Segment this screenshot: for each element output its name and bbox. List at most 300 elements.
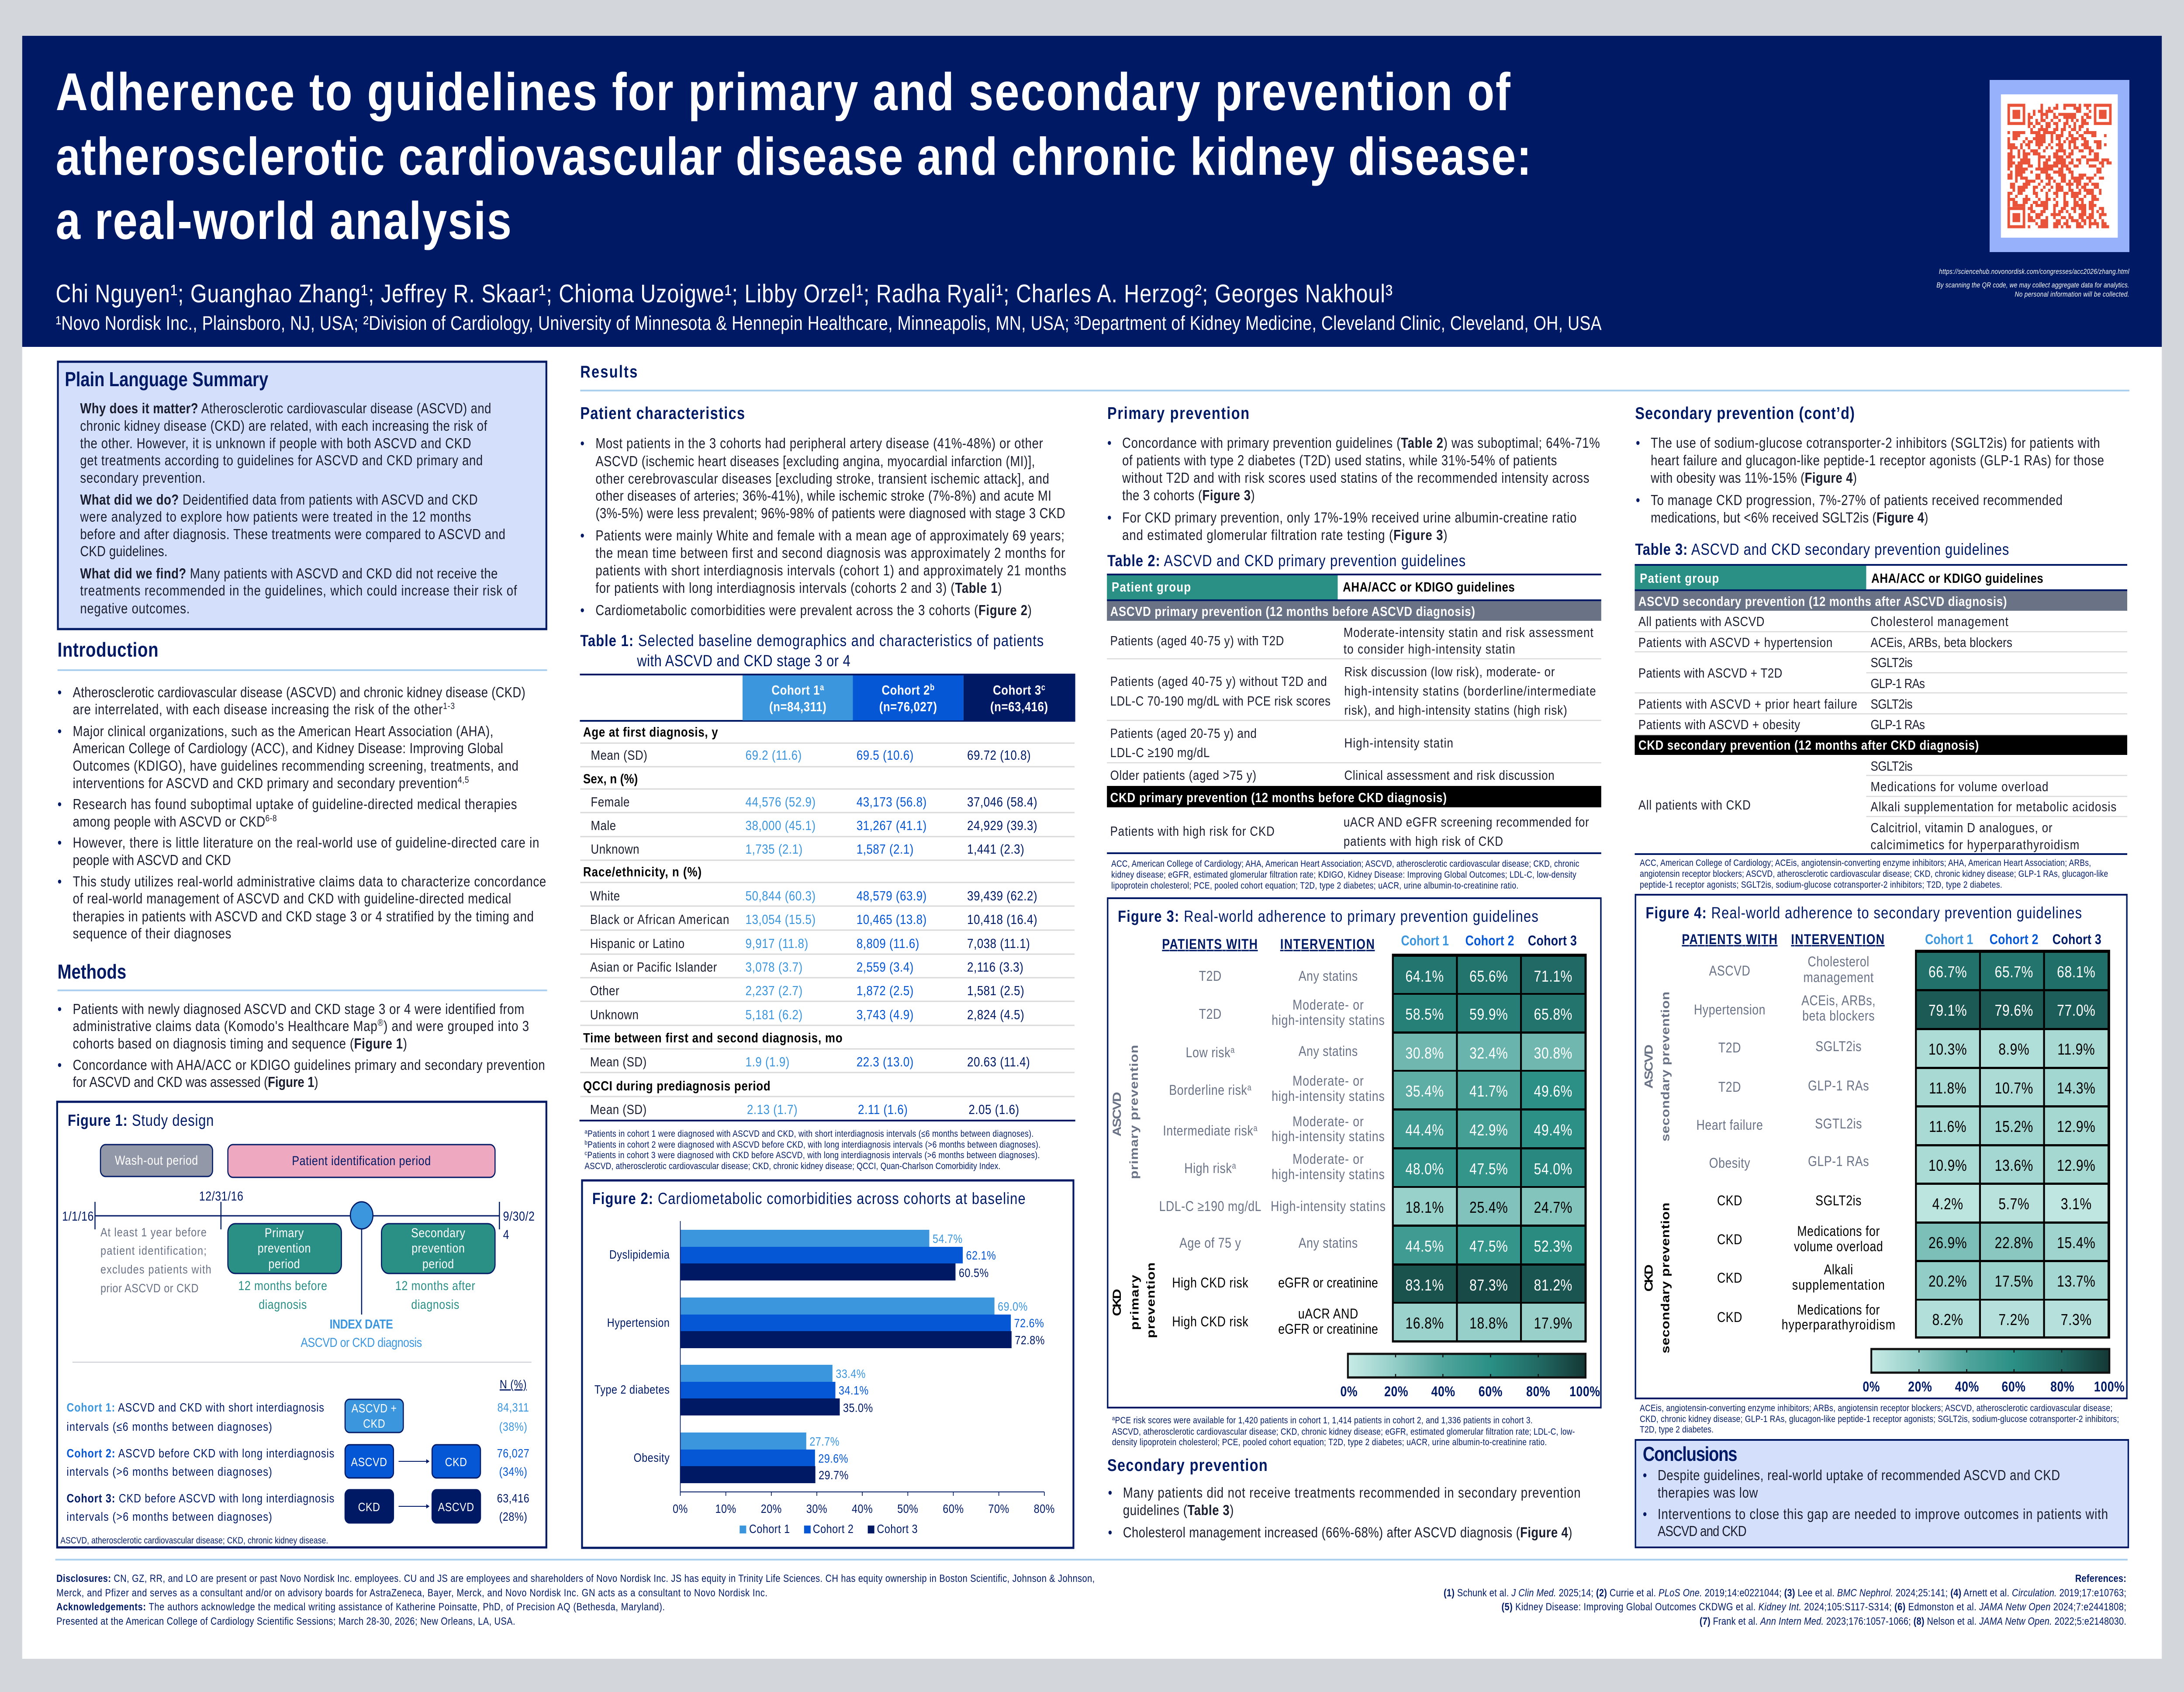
figure 4 heatmap: 14.3% (2057, 1080, 2096, 1097)
table 3 footnote: peptide-1 receptor agonists; SGLT2is, sodium-glucose cotransporter-2 inhibitors; T2D, type 2 diabetes. (1640, 880, 2002, 890)
table 1 rows (583, 725, 1037, 1118)
figure 4 rotated group labels: secondary prevention (1659, 1202, 1672, 1353)
section: patient characteristics (580, 404, 1067, 619)
figure 3 heatmap: 44.4% (1405, 1121, 1444, 1139)
table 1 rows: Age at first diagnosis, y (583, 725, 718, 740)
secondary prevention period box: prevention (411, 1241, 465, 1256)
chart axes: 30% (806, 1502, 827, 1516)
table 1 rows: Black or African American (590, 912, 729, 927)
panel: methods: Concordance with AHA/ACC or KDIGO guidelines primary and secondary prevention (73, 1058, 545, 1073)
authors: Chi Nguyen¹; Guanghao Zhang¹; Jeffrey R. Skaar¹; Chioma Uzoigwe¹; Libby Orzel¹; Radha Ryali¹; Charles A. Herzog²; Georges Nakhoul³ (56, 280, 1393, 308)
text: what did we do: CKD guidelines. (80, 544, 168, 560)
figure 3 row labels: Low risk (1186, 1045, 1230, 1061)
cohort 3 row: (28%) (499, 1510, 527, 1524)
panel: conclusions (1635, 1440, 2128, 1547)
bars: type 2 diabetes: Type 2 diabetes (594, 1383, 670, 1397)
cohort 3 header (964, 675, 1075, 720)
title (56, 62, 1532, 250)
figure 4 row labels: CKD (1717, 1232, 1742, 1248)
panel: methods: ) and were grouped into 3 (384, 1019, 529, 1035)
figure 3 rotated group labels: primary prevention (1127, 1045, 1140, 1179)
figure 3 heatmap (1392, 954, 1586, 1343)
panel: introduction: • (58, 797, 62, 813)
text: what did we find (80, 566, 517, 617)
table 2 rows: high-intensity statins (borderline/intermediate (1344, 684, 1596, 699)
figure 4 heatmap: 15.4% (2057, 1234, 2096, 1252)
bars: dyslipidemia: Dyslipidemia (609, 1248, 670, 1262)
table 3 ASCVD rows: SGLT2is (1870, 697, 1913, 712)
figure 3 row labels: uACR AND (1298, 1306, 1358, 1322)
table 1 rows: 10,465 (13.8) (857, 912, 927, 927)
table 1 rows: Female (591, 795, 630, 810)
section: secondary prevention continued: • (1636, 493, 1640, 509)
panel: conclusions: • (1643, 1507, 1647, 1522)
table 3 ASCVD rows: GLP-1 RAs (1870, 676, 1925, 692)
table 1 rows: 1.9 (1.9) (746, 1055, 790, 1070)
figure 4 row labels: CKD (1717, 1270, 1742, 1286)
figure 3 heatmap: 81.2% (1534, 1277, 1572, 1294)
table 3 footnote (1640, 858, 2108, 890)
figure 3 column headers (1162, 933, 1577, 952)
panel: conclusions: Interventions to close this gap are needed to improve outcomes in patients with (1658, 1507, 2108, 1522)
table 2 title: Table 2: ASCVD and CKD primary prevention guidelines (1107, 552, 1466, 570)
chart axes: 70% (988, 1502, 1009, 1516)
figure 4 heatmap: 8.2% (1932, 1311, 1963, 1329)
figure 4 heatmap: 10.9% (1928, 1157, 1967, 1175)
cohort 2 row: CKD (445, 1456, 467, 1469)
figure 3 colour scale: 60% (1479, 1384, 1503, 1400)
section: patient characteristics: ASCVD (ischemic heart diseases [excluding angina, myocardial infarction (MI)], (595, 454, 1035, 470)
section: secondary prevention: Secondary prevention (1107, 1456, 1268, 1475)
bars: hypertension: Hypertension (607, 1316, 670, 1330)
table 2 footnote: lipoprotein cholesterol; PCE, pooled cohort equation; T2D, type 2 diabetes; uACR, urine albumin-to-creatinine ratio. (1111, 881, 1519, 891)
section: secondary prevention: guidelines (Table 3) (1123, 1503, 1234, 1519)
figure 4 row labels: Heart failure (1697, 1118, 1763, 1133)
figure 3 row labels: high-intensity statins (1272, 1167, 1385, 1183)
figure 3 row labels: high-intensity statins (1272, 1129, 1385, 1145)
figure 4 heatmap: 10.7% (1995, 1080, 2033, 1097)
figure 3 heatmap: 71.1% (1534, 968, 1572, 986)
figure 4 footnote (1640, 1404, 2119, 1435)
table 1 rows: 39,439 (62.2) (967, 889, 1037, 904)
section: primary prevention: • (1107, 436, 1112, 451)
cohort 3 header: Cohort 3 (993, 683, 1041, 698)
cohort 1 row: ASCVD + (352, 1402, 397, 1415)
figure 3 row labels: Moderate- or (1292, 1114, 1364, 1130)
panel: introduction (58, 639, 547, 942)
secondary prevention period box: Secondary (411, 1225, 466, 1240)
figure 3 heatmap: 58.5% (1405, 1006, 1444, 1024)
panel: methods: cohorts based on diagnosis timing and sequence (Figure 1) (73, 1036, 408, 1052)
cohort 1 row: (38%) (499, 1420, 527, 1434)
section: primary prevention: For CKD primary prevention, only 17%-19% received urine albumin-creatine ratio (1122, 510, 1577, 526)
panel: methods (58, 961, 547, 1090)
figure 3 row labels: Moderate- or (1292, 1073, 1364, 1089)
figure 3 row labels: high-intensity statins (1272, 1013, 1385, 1028)
table 3 ASCVD rows: GLP-1 RAs (1870, 717, 1925, 733)
table 1 title: with ASCVD and CKD stage 3 or 4 (636, 652, 851, 670)
figure 3 colour scale: 40% (1431, 1384, 1455, 1400)
table 1 rows: Time between first and second diagnosis, mo (583, 1031, 843, 1046)
wash-out period box (100, 1145, 213, 1176)
section: patient characteristics: • (580, 528, 585, 544)
footer: references (1444, 1572, 2126, 1627)
table 3 header: AHA/ACC or KDIGO guidelines (1871, 571, 2043, 586)
table 3 CKD rows: Alkali supplementation for metabolic acidosis (1870, 799, 2117, 815)
cohort 3 header: (n=63,416) (990, 699, 1048, 715)
figure 4 heatmap: 79.1% (1928, 1002, 1967, 1020)
figure 3 heatmap: 30.8% (1534, 1045, 1572, 1062)
figure 3 heatmap: 24.7% (1534, 1199, 1572, 1217)
table 1 rows: 2.05 (1.6) (969, 1102, 1019, 1118)
figure 3 colour scale (1340, 1354, 1600, 1400)
table 1 rows: 31,267 (41.1) (857, 818, 927, 834)
wash-out description: patient identification; (100, 1244, 207, 1258)
table 1 rows: 2.11 (1.6) (858, 1102, 908, 1118)
table 1 rows: 5,181 (6.2) (746, 1007, 803, 1023)
section: primary prevention: without T2D and with risk scores used statins of the recommended intensity across (1122, 471, 1590, 486)
table 1 rows: Sex, n (%) (583, 772, 638, 787)
figure 3 heatmap: 41.7% (1469, 1083, 1508, 1100)
table 1 rows: 2.13 (1.7) (747, 1102, 798, 1118)
table 3 CKD rows: All patients with CKD (1638, 798, 1751, 813)
figure 3 heatmap: 25.4% (1469, 1199, 1508, 1217)
affiliations: ¹Novo Nordisk Inc., Plainsboro, NJ, USA; ²Division of Cardiology, University of Minnesota & Hennepin Healthcare, Minneapolis, MN, USA; ³Department of Kidney Medicine, Cleveland Clinic, Cleveland, OH, USA (56, 312, 1602, 334)
text: what did we do: before and after diagnosis. These treatments were compared to ASCVD and (80, 527, 506, 543)
cohort 3 header: c (1041, 682, 1046, 692)
figure 4 row labels: SGTL2is (1815, 1116, 1862, 1132)
figure 3 heatmap: 65.6% (1469, 968, 1508, 986)
table 2 footnote (1111, 859, 1579, 891)
table 3 title: Table 3: ASCVD and CKD secondary prevention guidelines (1635, 540, 2009, 559)
table 1 rows: 69.72 (10.8) (967, 748, 1031, 763)
table 2 rows: Patients (aged 40-75 y) without T2D and (1110, 674, 1327, 689)
bars: dyslipidemia: 54.7% (933, 1232, 963, 1246)
heading: results: Results (580, 362, 638, 381)
figure 4 column headers: Cohort 3 (2053, 932, 2101, 948)
figure 3 row labels: T2D (1199, 969, 1222, 984)
cohort 1 row (67, 1399, 529, 1434)
figure 3 heatmap: 87.3% (1469, 1277, 1508, 1294)
table 2 rows: Older patients (aged >75 y) (1110, 768, 1257, 783)
cohort 2 header: (n=76,027) (879, 699, 937, 715)
panel: conclusions: Despite guidelines, real-world uptake of recommended ASCVD and CKD (1658, 1468, 2060, 1484)
figure 4 row labels: Alkali (1824, 1262, 1853, 1278)
section: secondary prevention continued: To manage CKD progression, 7%-27% of patients received recommended (1651, 493, 2063, 509)
table 1 rows: Race/ethnicity, n (%) (583, 865, 702, 880)
figure 4 heatmap: 8.9% (1998, 1041, 2029, 1059)
figure 3 heatmap: 48.0% (1405, 1160, 1444, 1178)
figure 4 heatmap: 13.7% (2057, 1273, 2096, 1291)
figure 4 row labels: T2D (1718, 1080, 1741, 1095)
figure 4 heatmap: 22.8% (1995, 1234, 2033, 1252)
chart axes: 80% (1034, 1502, 1055, 1516)
wash-out description: excludes patients with (100, 1263, 211, 1277)
figure 4 column headers: Cohort 2 (1990, 932, 2039, 948)
table 1 rows: 2,237 (2.7) (746, 983, 803, 999)
table 1 rows: Mean (SD) (590, 1102, 647, 1118)
figure 4 row labels: hyperparathyroidism (1782, 1317, 1896, 1333)
timeline: 4 (503, 1227, 509, 1242)
figure 3 footnote: PCE risk scores were available for 1,420 patients in cohort 1, 1,414 patients in cohort 2, and 1,336 patients in cohort 3. (1115, 1416, 1533, 1426)
figure 3 colour scale: 80% (1526, 1384, 1550, 1400)
figure 3 heatmap: 65.8% (1534, 1006, 1572, 1024)
figure 4 heatmap: 11.6% (1929, 1118, 1966, 1136)
figure 4 footnote: ACEis, angiotensin-converting enzyme inhibitors; ARBs, angiotensin receptor blockers; ASCVD, atherosclerotic cardiovascular disease; (1640, 1404, 2113, 1413)
table 1 rows: 44,576 (52.9) (746, 795, 816, 810)
panel: introduction: Atherosclerotic cardiovascular disease (ASCVD) and chronic kidney disease (CKD) (73, 685, 525, 701)
table 1 rows: 43,173 (56.8) (857, 795, 927, 810)
figure 2 title: Figure 2: Cardiometabolic comorbidities across cohorts at baseline (592, 1190, 1026, 1208)
secondary prevention period box (381, 1224, 495, 1273)
bars: hypertension: 69.0% (998, 1300, 1028, 1314)
timeline: 1/1/16 (62, 1209, 94, 1224)
table 1 rows: 20.63 (11.4) (967, 1055, 1030, 1070)
table 2 rows (1110, 625, 1596, 783)
figure 3 heatmap: 52.3% (1534, 1238, 1572, 1256)
table 2 rows: Patients (aged 20-75 y) and (1110, 726, 1257, 741)
figure 3 column headers: Cohort 3 (1528, 933, 1577, 949)
table 1 rows: Asian or Pacific Islander (590, 960, 717, 975)
figure 3 column headers: INTERVENTION (1280, 937, 1375, 952)
bars: hypertension: 72.6% (1014, 1317, 1044, 1330)
figure 3 column headers: Cohort 2 (1465, 933, 1514, 949)
bars: dyslipidemia: 60.5% (959, 1266, 989, 1280)
cohort 2 row: 76,027 (497, 1447, 529, 1460)
title: Adherence to guidelines for primary and secondary prevention of (56, 62, 1511, 121)
12 months before (238, 1278, 328, 1312)
figure 4 row labels: GLP-1 RAs (1808, 1078, 1869, 1094)
table 2 CKD row: Patients with high risk for CKD (1110, 824, 1275, 839)
figure 4 column headers: INTERVENTION (1791, 932, 1885, 948)
table 2 footnote: kidney disease; eGFR, estimated glomerular filtration rate; KDIGO, Kidney Disease: Improving Global Outcomes; LDL-C, low-density (1111, 870, 1576, 880)
footer: disclosures and acknowledgements: Merck, and Pfizer and serves as a consultant and/or on advisory boards for AstraZeneca, Bayer, Merck, and Novo Nordisk Inc. GN acts as a consultant to Novo Nordisk Inc. (56, 1587, 768, 1599)
title: a real-world analysis (56, 190, 512, 250)
table 1 rows: Other (590, 983, 619, 999)
text: what did we do: were analyzed to explore how patients were treated in the 12 months (79, 509, 471, 525)
figure 3 heatmap: 30.8% (1405, 1045, 1444, 1062)
panel: introduction: Outcomes (KDIGO), have guidelines recommending screening, treatments, and (73, 758, 519, 774)
panel: introduction: among people with ASCVD or CKD (73, 814, 266, 830)
figure 4 row labels: ASCVD (1709, 963, 1750, 979)
figure 3 heatmap: 17.9% (1534, 1315, 1572, 1332)
section: secondary prevention: Many patients did not receive treatments recommended in secondary prevention (1123, 1485, 1581, 1501)
section: secondary prevention continued: The use of sodium-glucose cotransporter-2 inhibitors (SGLT2is) for patients with (1651, 436, 2100, 451)
figure 4 heatmap: 79.6% (1995, 1002, 2033, 1020)
panel: conclusions: • (1643, 1468, 1647, 1484)
cohort 2 row: ASCVD (351, 1456, 387, 1469)
figure 3 column headers: Cohort 1 (1401, 933, 1449, 949)
table 3 ASCVD rows: SGLT2is (1870, 655, 1913, 671)
section: secondary prevention: • (1108, 1525, 1113, 1541)
panel: methods: for ASCVD and CKD was assessed (Figure 1) (73, 1075, 318, 1090)
section: primary prevention: Primary prevention (1107, 404, 1250, 423)
figure 3 rotated group labels: prevention (1144, 1262, 1158, 1338)
figure 4 heatmap: 4.2% (1932, 1195, 1963, 1213)
figure 4 heatmap: 11.8% (1929, 1080, 1966, 1097)
cohort 1 row: CKD (363, 1417, 385, 1431)
footer: references: (7) Frank et al. Ann Intern Med. 2023;176:1057-1066; (8) Nelson et al. JAMA Netw Open. 2022;5:e2148030. (1700, 1615, 2126, 1627)
panel: introduction: 1-3 (443, 702, 455, 711)
chart legend: Cohort 2 (813, 1522, 854, 1536)
section: secondary prevention continued: Secondary prevention (cont’d) (1635, 404, 1855, 423)
section: primary prevention: • (1107, 510, 1112, 526)
panel: introduction: are interrelated, with each disease increasing the risk of the other (73, 702, 443, 718)
section: patient characteristics: • (580, 603, 585, 619)
figure 4 row labels: ACEis, ARBs, (1801, 993, 1876, 1009)
figure 4 row labels (1694, 954, 1896, 1333)
figure 4 colour scale: 60% (2001, 1379, 2026, 1395)
cohort 1 row: intervals (≤6 months between diagnoses) (67, 1420, 272, 1434)
table 1: baseline characteristics (580, 632, 1075, 1171)
primary prevention period box: Primary (265, 1225, 304, 1240)
panel: introduction: • (58, 874, 62, 890)
chart legend (740, 1522, 918, 1536)
text: what did we find: treatments recommended in the guidelines, which could increase their risk of (80, 583, 517, 599)
section: secondary prevention continued: medications, but <6% received SGLT2is (Figure 4) (1651, 510, 1928, 526)
table 3 CKD rows: Calcitriol, vitamin D analogues, or (1870, 820, 2053, 836)
text: why does it matter: chronic kidney disease (CKD) are related, with each increasing the risk of (80, 419, 487, 434)
panel: introduction: Research has found suboptimal uptake of guideline-directed medical therapies (73, 797, 517, 813)
chart legend: Cohort 1 (749, 1522, 790, 1536)
cohort 1 header (743, 675, 853, 720)
bars: hypertension (607, 1298, 1045, 1348)
cohort 2 header: b (930, 682, 935, 692)
section: patient characteristics: Patients were mainly White and female with a mean age of approximately 69 years; (595, 528, 1065, 544)
table 1 footnotes: a (584, 1128, 588, 1135)
patient identification period box: Patient identification period (292, 1153, 431, 1168)
table 1 rows: 7,038 (11.1) (967, 936, 1030, 952)
panel: introduction: American College of Cardiology (ACC), and Kidney Disease: Improving Global (73, 741, 504, 757)
section: patient characteristics: (3%-5%) were less prevalent; 96%-98% of patients were diagnosed with stage 3 CKD (595, 506, 1065, 522)
figure 4 colour scale: 20% (1908, 1379, 1932, 1395)
panel: introduction: Major clinical organizations, such as the American Heart Association (AHA), (73, 724, 494, 740)
heading: results (580, 362, 2129, 391)
figure 3 row labels: High risk (1184, 1161, 1232, 1176)
section: patient characteristics: Cardiometabolic comorbidities were prevalent across the 3 cohorts (Figure 2) (595, 603, 1032, 619)
chart axes: 40% (852, 1502, 873, 1516)
table 1 rows: Unknown (590, 1007, 639, 1023)
panel: methods: administrative claims data (Komodo's Healthcare Map (73, 1019, 377, 1035)
table 1 rows: Mean (SD) (591, 748, 647, 763)
figure 4 row labels: Hypertension (1694, 1002, 1766, 1018)
table 2 rows: risk), and high-intensity statins (high risk) (1344, 703, 1567, 718)
table 1 rows: Mean (SD) (590, 1055, 647, 1070)
bars: obesity: Obesity (634, 1451, 670, 1465)
figure 4 heatmap: 13.6% (1995, 1157, 2033, 1175)
table 1 rows: Hispanic or Latino (590, 936, 685, 952)
cohort 2 row (67, 1445, 529, 1479)
figure 3 heatmap: 16.8% (1405, 1315, 1444, 1332)
figure 4 rotated group labels: CKD (1642, 1264, 1655, 1291)
figure 3 row labels: a (1247, 1083, 1251, 1092)
figure 3 row labels: a (1232, 1161, 1236, 1170)
figure 3 row labels: Any statins (1299, 969, 1358, 984)
panel: introduction: This study utilizes real-world administrative claims data to characterize concordance (73, 874, 546, 890)
section: patient characteristics: other diseases of arteries; 36%-41%), while ischemic stroke (7%-8%) and acute MI (595, 488, 1052, 504)
figure 4 heatmap: 65.7% (1995, 963, 2033, 981)
figure 4 heatmap: 26.9% (1928, 1234, 1967, 1252)
text: why does it matter: get treatments according to guidelines for ASCVD and CKD primary and (80, 453, 483, 469)
figure 4 heatmap: 66.7% (1928, 963, 1967, 981)
table 3 band: ASCVD (1635, 591, 2127, 611)
figure 4 column headers (1682, 932, 2101, 948)
timeline: 9/30/2 (503, 1209, 535, 1224)
panel: methods: Patients with newly diagnosed ASCVD and CKD stage 3 or 4 were identified from (73, 1002, 525, 1017)
header banner (22, 36, 2162, 347)
section: secondary prevention: Cholesterol management increased (66%-68%) after ASCVD diagnosis (Figure 4) (1123, 1525, 1572, 1541)
table 2 rows: LDL-C 70-190 mg/dL with PCE risk scores (1110, 694, 1331, 709)
heading: plain language summary: Plain Language Summary (65, 368, 269, 391)
table 2 header: Patient group (1112, 580, 1191, 595)
figure 4 row labels: volume overload (1794, 1239, 1883, 1255)
table 1 rows: Male (591, 818, 616, 834)
panel: conclusions: ASCVD and CKD (1658, 1524, 1747, 1540)
table 2 band: ASCVD (1107, 601, 1601, 621)
text: why does it matter (80, 401, 491, 486)
figure 4 row labels: SGLT2is (1815, 1039, 1862, 1055)
text: what did we do: What did we do? Deidentified data from patients with ASCVD and CKD (80, 492, 478, 508)
figure 3 heatmap: 54.0% (1534, 1160, 1572, 1178)
figure 4 colour scale: 0% (1863, 1379, 1880, 1395)
table 1 rows: 1,587 (2.1) (857, 842, 914, 857)
table 1 rows: 2,824 (4.5) (967, 1007, 1024, 1023)
figure 3 footnote: density lipoprotein cholesterol; PCE, pooled cohort equation; T2D, type 2 diabetes; uACR, urine albumin-to-creatinine ratio. (1112, 1438, 1547, 1447)
figure 3 row labels: Intermediate risk (1163, 1123, 1253, 1139)
section: primary prevention: of patients with type 2 diabetes (T2D) used statins, while 31%-54% of patients (1122, 453, 1557, 469)
section: primary prevention: Concordance with primary prevention guidelines (Table 2) was suboptimal; 64%-71% (1122, 436, 1600, 451)
table 1 footnotes: b (584, 1139, 587, 1146)
table 2 CKD row (1110, 815, 1589, 849)
table 1 footnotes: Patients in cohort 3 were diagnosed with CKD before ASCVD, with long interdiagnosis intervals (>6 months between diagnoses). (587, 1151, 1040, 1160)
cohort 2 row: (34%) (499, 1465, 527, 1479)
table 1 rows: 13,054 (15.5) (746, 912, 816, 927)
figure 3 footnote (1112, 1415, 1575, 1447)
figure 4 footnote: CKD, chronic kidney disease; GLP-1 RAs, glucagon-like peptide-1 receptor agonists; SGLT2is, sodium-glucose cotransporter-2 inhibitors; (1640, 1415, 2119, 1424)
table 1 footnotes: c (584, 1149, 587, 1156)
figure 3 heatmap: 49.4% (1534, 1121, 1572, 1139)
section: patient characteristics: Most patients in the 3 cohorts had peripheral artery disease (41%-48%) or other (595, 436, 1043, 452)
section: secondary prevention continued: with obesity was 11%-15% (Figure 4) (1650, 471, 1857, 486)
figure 3 heatmap: 18.1% (1405, 1199, 1444, 1217)
figure 4 row labels: Medications for (1797, 1302, 1880, 1318)
figure 4 column headers: PATIENTS WITH (1682, 932, 1778, 948)
table 2 rows: Moderate-intensity statin and risk assessment (1344, 625, 1593, 640)
figure 3 row labels: high-intensity statins (1272, 1089, 1385, 1104)
bars: type 2 diabetes: 35.0% (843, 1401, 873, 1415)
table 2 CKD row: patients with high risk of CKD (1344, 834, 1503, 849)
figure 4 column headers: Cohort 1 (1925, 932, 1973, 948)
panel: methods: • (58, 1002, 62, 1017)
figure 3 heatmap: 83.1% (1405, 1277, 1444, 1294)
wash-out description (100, 1226, 211, 1295)
figure 4 heatmap: 7.3% (2061, 1311, 2092, 1329)
panel: methods: ® (377, 1018, 384, 1028)
figure 3 heatmap: 64.1% (1405, 968, 1444, 986)
timeline (62, 1189, 535, 1315)
table 3 ASCVD rows (1638, 614, 2013, 733)
bars: obesity: 29.7% (819, 1469, 849, 1482)
figure 4 row labels: CKD (1717, 1193, 1742, 1209)
figure 4 heatmap: 15.2% (1995, 1118, 2033, 1136)
figure 4 row labels: management (1803, 970, 1874, 986)
figure 4 heatmap: 17.5% (1995, 1273, 2033, 1291)
cohort 1 header: Cohort 1 (771, 683, 820, 698)
figure 3 rotated group labels: CKD (1110, 1289, 1123, 1316)
figure 3 heatmap: 47.5% (1469, 1160, 1508, 1178)
figure 2: comorbidities bar chart (582, 1180, 1074, 1548)
panel: introduction: • (58, 835, 62, 851)
